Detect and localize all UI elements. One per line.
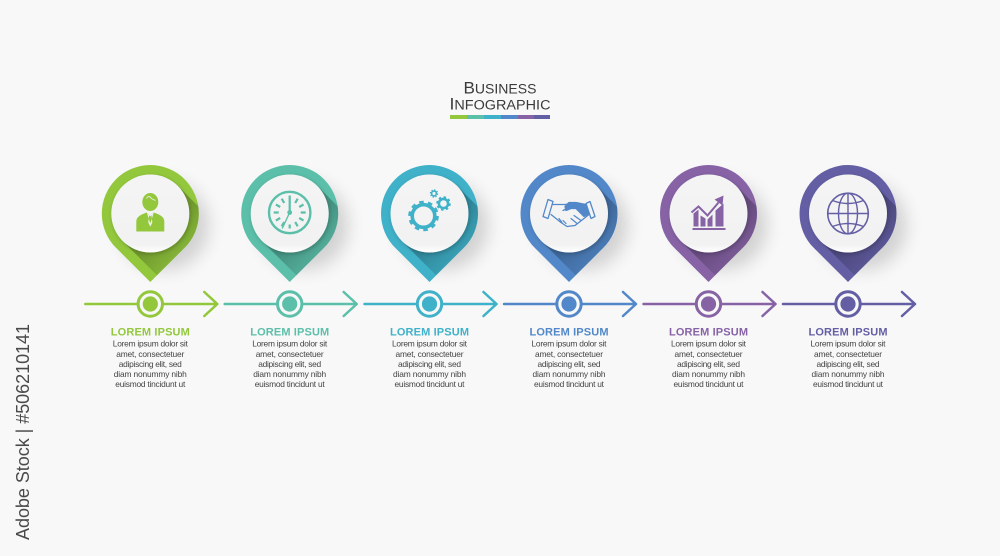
step 1: business person <box>102 165 214 282</box>
text block 1: diam nonummy nibh <box>114 369 187 379</box>
text block 4: diam nonummy nibh <box>532 369 606 379</box>
step 6: globe <box>800 165 912 282</box>
text block 5: euismod tincidunt ut <box>674 379 744 389</box>
text block 6: LOREM IPSUM <box>808 326 888 338</box>
watermarks: Adobe Stock <box>339 256 504 396</box>
watermarks: Adobe Stock <box>379 386 544 526</box>
text block 2: LOREM IPSUM <box>250 326 329 338</box>
pin <box>102 165 214 282</box>
text block 4 <box>530 326 608 389</box>
timeline arrow 6 <box>783 292 915 316</box>
watermarks: Adobe Stock <box>209 211 374 351</box>
text block 6: amet, consectetuer <box>814 349 882 359</box>
timeline arrow 3 <box>364 292 496 316</box>
pin <box>800 165 912 282</box>
text block 5 <box>669 326 748 389</box>
text block 2: Lorem ipsum dolor sit <box>252 339 328 349</box>
text block 1 <box>111 326 190 389</box>
side label: Adobe Stock id: Adobe Stock | #506210141 <box>13 324 33 540</box>
watermarks: Adobe Stock <box>174 416 339 556</box>
text block 3: diam nonummy nibh <box>393 369 466 379</box>
title: INFOGRAPHIC <box>450 96 551 114</box>
text block 1: Lorem ipsum dolor sit <box>113 339 188 349</box>
text block 2: adipiscing elit, sed <box>258 359 322 369</box>
watermarks: Adobe Stock <box>674 251 839 391</box>
text block 6 <box>808 326 888 389</box>
title: BUSINESS <box>464 80 536 98</box>
icon: gears <box>410 190 450 230</box>
text block 3: adipiscing elit, sed <box>398 359 461 369</box>
watermarks: Adobe Stock <box>509 416 674 556</box>
step 2: clock <box>241 165 354 282</box>
watermarks: Adobe Stock <box>374 56 539 196</box>
icon: clock <box>269 192 310 233</box>
text block 1: euismod tincidunt ut <box>115 379 186 389</box>
pin <box>520 165 634 282</box>
title colour bar <box>450 115 550 119</box>
step 3: gears <box>381 165 494 282</box>
pin <box>241 165 354 282</box>
text block 5: amet, consectetuer <box>674 349 743 359</box>
text block 4: euismod tincidunt ut <box>534 379 605 389</box>
pin <box>660 165 773 282</box>
title <box>450 80 551 114</box>
text block 6: diam nonummy nibh <box>812 369 885 379</box>
text block 1: amet, consectetuer <box>116 349 185 359</box>
text block 5: adipiscing elit, sed <box>677 359 740 369</box>
timeline arrow 4 <box>504 292 636 316</box>
timeline arrow 5 <box>644 292 776 316</box>
text block 4: adipiscing elit, sed <box>538 359 601 369</box>
text block 3 <box>390 326 469 389</box>
text block 2: diam nonummy nibh <box>253 369 327 379</box>
text block 4: Lorem ipsum dolor sit <box>532 339 607 349</box>
watermarks: Adobe Stock <box>14 241 179 381</box>
text block 1: adipiscing elit, sed <box>119 359 182 369</box>
text block 3: amet, consectetuer <box>396 349 464 359</box>
watermarks: Adobe Stock <box>49 376 214 516</box>
text block 2: euismod tincidunt ut <box>255 379 325 389</box>
watermarks: Adobe Stock <box>709 51 874 191</box>
watermarks: Adobe Stock <box>544 216 709 356</box>
text block 2 <box>250 326 329 389</box>
timeline arrow 2 <box>225 292 357 316</box>
pin <box>381 165 494 282</box>
icon: growth chart <box>692 196 726 230</box>
text block 2: amet, consectetuer <box>256 349 324 359</box>
step 5: growth chart <box>660 165 773 282</box>
timeline arrow 1 <box>85 292 217 316</box>
text block 4: amet, consectetuer <box>535 349 603 359</box>
step 4: handshake <box>520 165 634 282</box>
icon: business person <box>136 193 164 232</box>
text block 3: euismod tincidunt ut <box>394 379 465 389</box>
watermarks: Adobe Stock <box>839 86 1000 226</box>
text block 5: diam nonummy nibh <box>672 369 745 379</box>
text block 1: LOREM IPSUM <box>111 326 190 338</box>
text block 3: LOREM IPSUM <box>390 326 469 338</box>
icon: globe <box>828 193 868 234</box>
text block 4: LOREM IPSUM <box>530 326 608 338</box>
watermarks: Adobe Stock <box>714 381 879 521</box>
text block 6: euismod tincidunt ut <box>813 379 884 389</box>
text block 6: adipiscing elit, sed <box>816 359 880 369</box>
watermarks: Adobe Stock <box>34 46 199 186</box>
icon: handshake <box>543 200 595 226</box>
watermarks: Adobe Stock <box>504 81 669 221</box>
watermarks: Adobe Stock <box>169 76 334 216</box>
text block 5: Lorem ipsum dolor sit <box>671 339 747 349</box>
text block 5: LOREM IPSUM <box>669 326 748 338</box>
text block 3: Lorem ipsum dolor sit <box>392 339 468 349</box>
text block 6: Lorem ipsum dolor sit <box>810 339 886 349</box>
